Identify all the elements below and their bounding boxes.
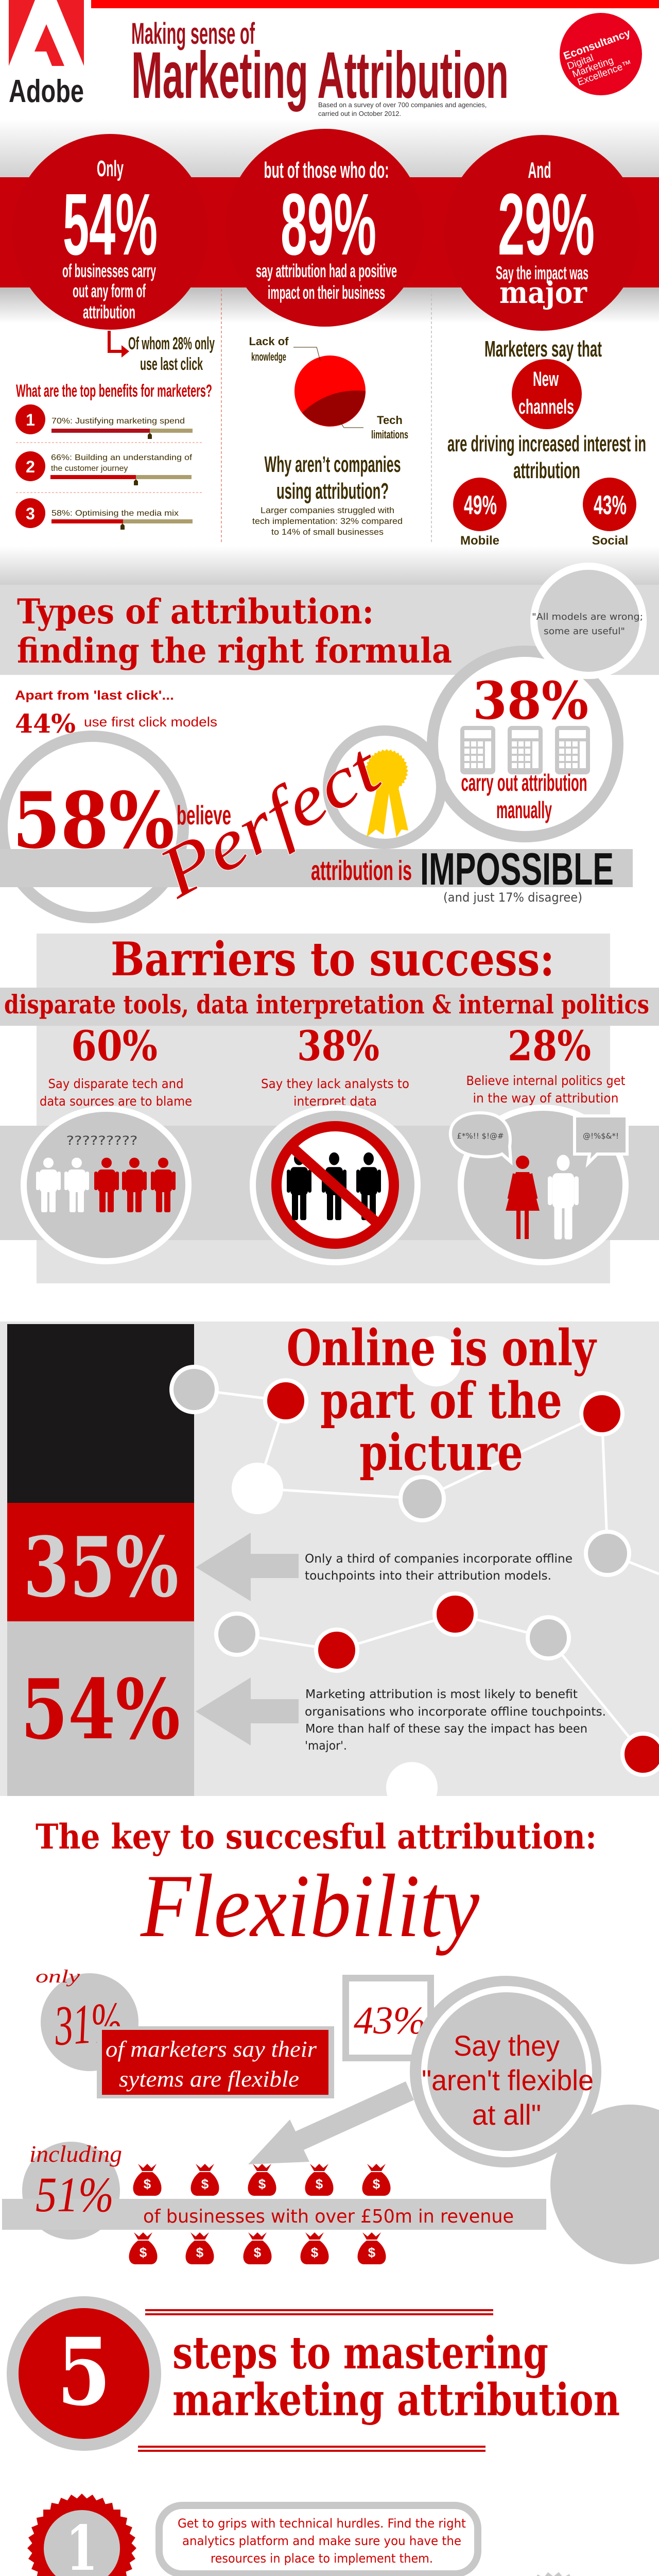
quote circle [532, 566, 643, 675]
text: offline third [305, 1552, 573, 1583]
stat circle: 54%: of businesses carry [62, 260, 156, 281]
text: benefit offline: More than half of these say the impact has been [305, 1722, 587, 1736]
badge 1 [27, 2494, 136, 2576]
stat: 58% believe: 58% [12, 775, 175, 866]
text: last click [128, 334, 215, 374]
step 1: analytics platform and make sure you have the [182, 2534, 461, 2548]
stat: 31% flexible [36, 1966, 334, 2098]
heading: types of attribution [17, 591, 452, 671]
barrier: 38%: interpret data [293, 1094, 377, 1109]
heading: key to attribution: The key to succesful attribution: [36, 1817, 597, 1857]
stat: 43% not flexible [248, 1975, 659, 2264]
background bands stats [0, 119, 659, 177]
stat: mobile 49%: Mobile [460, 534, 499, 548]
text: last click: use last click [140, 354, 203, 374]
pie chart: Tech [377, 414, 403, 427]
dividers [221, 289, 222, 542]
circle decor middle [328, 731, 441, 844]
benefit 3 [15, 498, 193, 530]
stat: mobile 49%: 49% [464, 490, 497, 520]
logo: Econsultancy header: Econsultancy [562, 27, 632, 62]
text: last click: Of whom 28% only [128, 334, 215, 353]
icon: rosette [365, 749, 408, 837]
arrow: last click [109, 331, 129, 358]
logo: Econsultancy header: Marketing [571, 55, 615, 80]
stat: social 43%: 43% [594, 490, 627, 520]
pie chart [249, 335, 408, 441]
stat: 51% revenue: 51% [36, 2167, 114, 2222]
arrow 1 [196, 1533, 299, 1601]
barrier: 38%: Say they lack analysts to [261, 1076, 409, 1091]
heading: types of attribution: finding the right formula [17, 631, 452, 671]
barrier: 60% [40, 1022, 192, 1109]
stat: 51% revenue: of businesses with over £50m in revenue [143, 2206, 514, 2227]
benefit 1: 70%: Justifying marketing spend [51, 417, 185, 426]
text: Perfect: Perfect [146, 727, 394, 913]
heading: online [286, 1319, 597, 1482]
heading: 5 steps: 5 [57, 2318, 111, 2427]
text: new channels: channels [518, 396, 574, 418]
barrier: 28% [466, 1022, 626, 1106]
stat circle: 54%: 54% [63, 176, 158, 274]
text: first click: 44% [15, 708, 76, 739]
benefit 3: 3 [26, 504, 35, 523]
logo: Econsultancy header [560, 13, 642, 95]
step 1 [159, 2505, 478, 2574]
barrier: 38%: 38% [297, 1022, 379, 1070]
barrier: 38% [261, 1022, 409, 1109]
text: why aren't companies: Why aren’t companies [265, 452, 401, 477]
top red bar [91, 0, 659, 8]
arrow 2 [196, 1677, 299, 1745]
stat: social 43%: Social [592, 534, 628, 548]
stat: 43% not flexible: "aren't flexible [422, 2064, 594, 2096]
heading: types of attribution: Types of attribution: [17, 591, 374, 632]
stat circle: 29%: And [528, 158, 551, 183]
text: first click [15, 688, 217, 739]
stat: 31% flexible: only [36, 1966, 80, 1987]
subtitle: carried out in October 2012. [318, 110, 401, 117]
logo: Adobe header [9, 0, 84, 109]
stat: social 43% [583, 478, 636, 548]
icon: internal politics [450, 1108, 627, 1262]
text: why aren't companies: Larger companies struggled with [261, 505, 394, 515]
stat: mobile 49% [453, 478, 507, 548]
text: attribution is impossible [311, 843, 614, 905]
stat circle: 54% [12, 134, 208, 330]
stat circle: 89%: but of those who do: [264, 158, 389, 183]
icon: no analysts [253, 1108, 418, 1262]
heading: barriers: Barriers to success: [111, 932, 554, 987]
badge 2 [495, 2567, 613, 2576]
stat: 51% revenue [2, 2141, 546, 2264]
circle decor left [2, 736, 183, 918]
subtitle: Based on a survey of over 700 companies and agencies, [318, 101, 487, 109]
stat circle: 89%: 89% [281, 176, 376, 274]
text: benefit offline [305, 1688, 606, 1753]
text: benefit offline: organisations who incorporate offline touchpoints. [305, 1705, 606, 1719]
heading: key to attribution [36, 1817, 597, 1956]
stat circle: 54%: Only [97, 156, 124, 181]
circle: 38% manual [432, 651, 618, 837]
text: new channels: attribution [513, 458, 580, 483]
panel: barriers [0, 932, 659, 1283]
text: offline third: Only a third of companies incorporate offline [305, 1552, 573, 1566]
stat circle: 54%: out any form of [73, 280, 146, 301]
text: new channels [447, 336, 646, 483]
stat circle: 54%: attribution [83, 301, 135, 323]
barrier: 60%: data sources are to blame [40, 1094, 192, 1109]
barrier: 60%: 60% [71, 1022, 158, 1070]
stat: 31% flexible: of marketers say their [106, 2037, 317, 2062]
benefit 3: 58%: Optimising the media mix [51, 509, 179, 518]
heading: online: picture [359, 1423, 523, 1482]
stat: 43% not flexible: 43% [354, 1999, 426, 2042]
logo: Adobe header: Adobe [9, 74, 84, 109]
quote circle: some are useful" [544, 626, 625, 637]
heading: key to attribution: Flexibility [140, 1856, 479, 1956]
types band [0, 546, 659, 585]
text: offline third: touchpoints into their attribution models. [305, 1569, 551, 1583]
text: benefit offline: Marketing attribution is most likely to benefit [305, 1688, 578, 1701]
icon: internal politics: £*%!! $!@# [457, 1131, 504, 1141]
heading: 5 steps: steps to mastering [172, 2327, 548, 2379]
barrier: 28%: Believe internal politics get [466, 1073, 626, 1088]
heading: top benefits: What are the top benefits for marketers? [16, 381, 212, 401]
icon: disparate people [24, 1109, 188, 1261]
heading: online: part of the [320, 1371, 562, 1430]
stat: 54%: 54% [21, 1661, 180, 1758]
panel: online is only part [0, 1319, 659, 1811]
stat: 31% flexible: 31% [52, 1990, 124, 2057]
stat circle: 89%: impact on their business [268, 282, 385, 303]
stat circle: 29%: major [499, 275, 587, 310]
benefit 1: 1 [26, 411, 35, 429]
network [194, 1389, 659, 1754]
stat: 35%: 35% [23, 1519, 179, 1616]
text: why aren't companies: to 14% of small businesses [271, 527, 384, 537]
stat: 58% believe: believe [177, 801, 231, 831]
pie chart: limitations [371, 428, 408, 441]
barrier: 60%: Say disparate tech and [48, 1076, 183, 1091]
step 1: resources in place to implement them. [211, 2551, 433, 2566]
text: attribution is impossible: (and just 17% disagree) [443, 890, 582, 905]
text: first click: Apart from 'last click'... [15, 688, 174, 703]
stat circle: 89%: say attribution had a positive [256, 260, 397, 281]
stat: 43% not flexible: at all" [472, 2098, 541, 2131]
logo: Econsultancy header: Digital [566, 53, 595, 72]
benefit 2: 66%: Building an understanding of [51, 453, 193, 462]
benefit 2: the customer journey [51, 464, 128, 473]
text: why aren't companies [252, 452, 403, 537]
stat: 51% revenue: including [29, 2141, 122, 2167]
pie chart: Lack of [249, 335, 289, 348]
barrier: 28%: in the way of attribution [473, 1091, 619, 1106]
logo: Econsultancy header: Excellence™ [576, 58, 633, 88]
step 1: Get to grips with technical hurdles. Find the right [178, 2516, 466, 2531]
icon: internal politics: @!%$&*! [583, 1131, 619, 1141]
barrier: 28%: 28% [508, 1022, 591, 1070]
pie chart: knowledge [251, 350, 286, 363]
circle: 38% manual: manually [496, 796, 552, 823]
band: impossible [0, 849, 633, 887]
heading: online: Online is only [286, 1319, 597, 1377]
quote circle: "All models are wrong; [532, 612, 643, 622]
subtitle [318, 101, 487, 117]
heading: barriers [4, 932, 649, 1020]
text: why aren't companies: using attribution? [276, 479, 389, 504]
title: Making sense of [131, 17, 255, 50]
stat: 43% not flexible: Say they [454, 2029, 560, 2062]
stat: 31% flexible: sytems are flexible [119, 2066, 299, 2092]
heading: 5 steps [7, 2296, 620, 2452]
stat circle: 89% [226, 129, 424, 327]
title [131, 17, 509, 112]
icon: disparate people: ????????? [66, 1133, 138, 1148]
text: why aren't companies: tech implementation: 32% compared [252, 516, 403, 526]
icon: money bags [129, 2164, 390, 2264]
text: first click: use first click models [84, 714, 217, 730]
benefit 2: 2 [26, 457, 35, 476]
benefit 2 [15, 451, 193, 485]
text: new channels: New [533, 368, 559, 391]
text: attribution is impossible: attribution is [311, 855, 412, 886]
stat circle: 29% [444, 135, 640, 331]
benefit 1 [15, 404, 193, 439]
text: benefit offline: 'major'. [305, 1739, 347, 1753]
circle: 38% manual: 38% [473, 670, 588, 731]
